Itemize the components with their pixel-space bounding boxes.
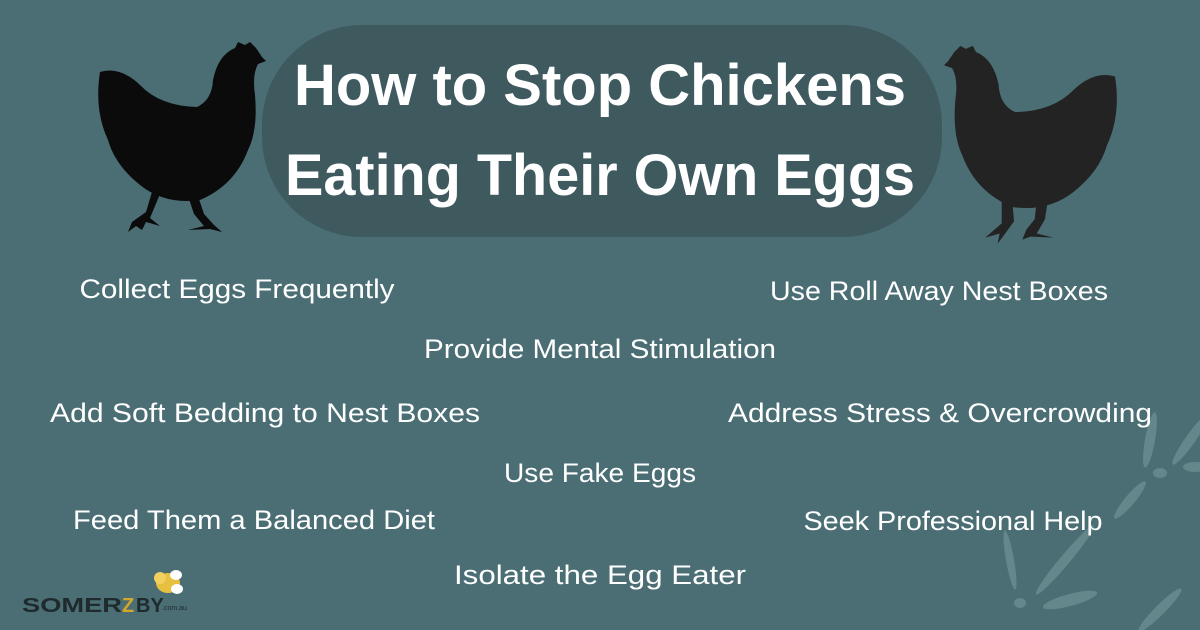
- title: [285, 53, 915, 208]
- logo: BY: [136, 595, 164, 617]
- decorative leaves: [1001, 412, 1200, 630]
- logo: SOMER: [22, 595, 123, 617]
- tip: Add Soft Bedding: Add Soft Bedding to Nest Boxes: [50, 398, 480, 428]
- tip: Address Stress: Address Stress & Overcrowding: [728, 398, 1152, 428]
- tip: Isolate the Egg Eater: Isolate the Egg Eater: [454, 560, 746, 590]
- tip: Use Fake Eggs: Use Fake Eggs: [504, 458, 696, 488]
- title: How to Stop Chickens: [294, 53, 906, 118]
- logo: [22, 570, 187, 617]
- logo: .com.au: [162, 605, 187, 612]
- logo: Z: [122, 595, 134, 617]
- tip: Seek Professional Help: Seek Professional Help: [804, 506, 1102, 536]
- title: Eating Their Own Eggs: [285, 143, 915, 208]
- tip: Provide Mental Stimulation: Provide Mental Stimulation: [424, 334, 776, 364]
- icon: left chicken: [98, 42, 266, 232]
- tip: Use Roll Away Nest Boxes: Use Roll Away Nest Boxes: [770, 276, 1108, 306]
- title pill: [262, 25, 942, 237]
- icon: right chicken: [944, 46, 1117, 244]
- tip: Balanced Diet: Feed Them a Balanced Diet: [73, 505, 436, 535]
- tip: Collect Eggs Frequently: Collect Eggs Frequently: [80, 274, 395, 304]
- tips: [50, 274, 1152, 590]
